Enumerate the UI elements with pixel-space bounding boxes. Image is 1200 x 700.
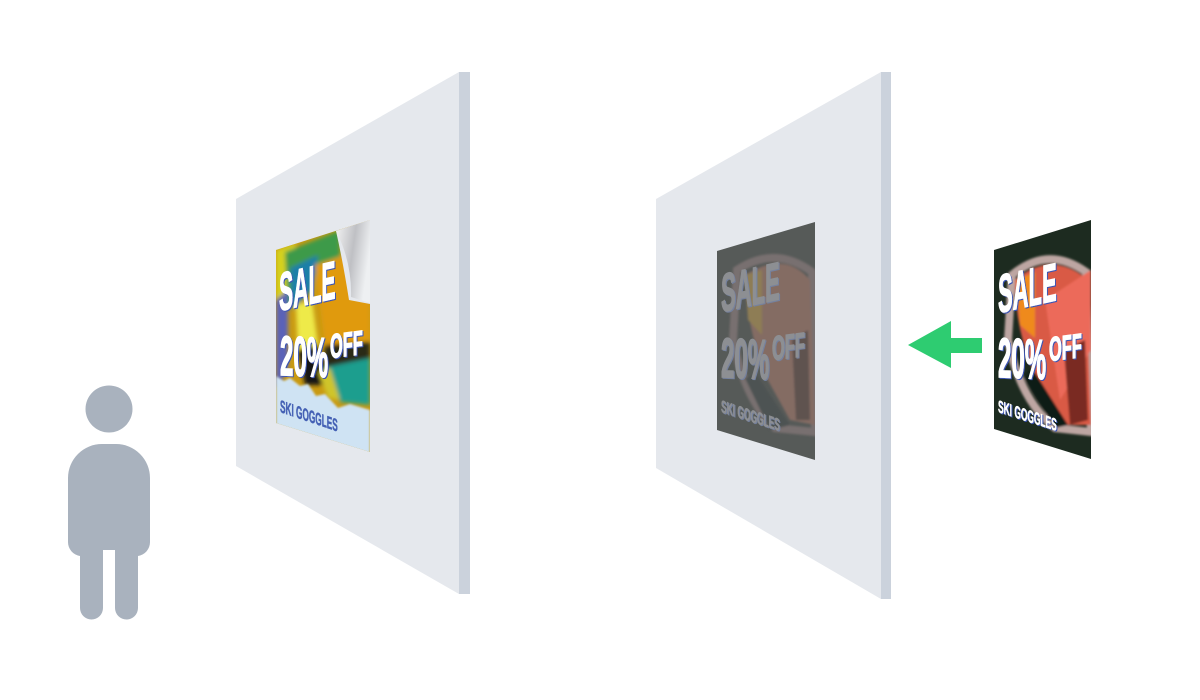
poster artwork: colourful goggles <box>276 220 370 452</box>
arrow: green pointing left <box>908 321 982 368</box>
dimmed poster on right wall <box>717 222 815 460</box>
poster text: SALE <box>721 251 780 324</box>
poster text: SKI GOGGLES <box>721 397 780 435</box>
wall: left <box>236 72 470 594</box>
poster on left wall with peeling corner: SKI GOGGLES <box>280 396 338 435</box>
poster text: SALE <box>998 252 1057 325</box>
poster on left wall with peeling corner <box>276 220 370 452</box>
poster text <box>279 250 363 390</box>
poster text <box>998 252 1082 435</box>
poster text: 20% <box>998 328 1046 392</box>
poster text: 20% <box>721 328 769 392</box>
peeled corner <box>336 220 370 304</box>
person icon <box>68 386 150 620</box>
new poster <box>994 220 1091 459</box>
poster text: SKI GOGGLES <box>998 397 1057 435</box>
wall: right <box>656 72 891 599</box>
poster text: OFF <box>1049 326 1082 369</box>
poster text: OFF <box>330 323 363 366</box>
poster text: SALE <box>279 250 336 323</box>
poster text: 20% <box>280 326 328 390</box>
poster text <box>721 251 805 435</box>
poster text: OFF <box>772 325 805 368</box>
